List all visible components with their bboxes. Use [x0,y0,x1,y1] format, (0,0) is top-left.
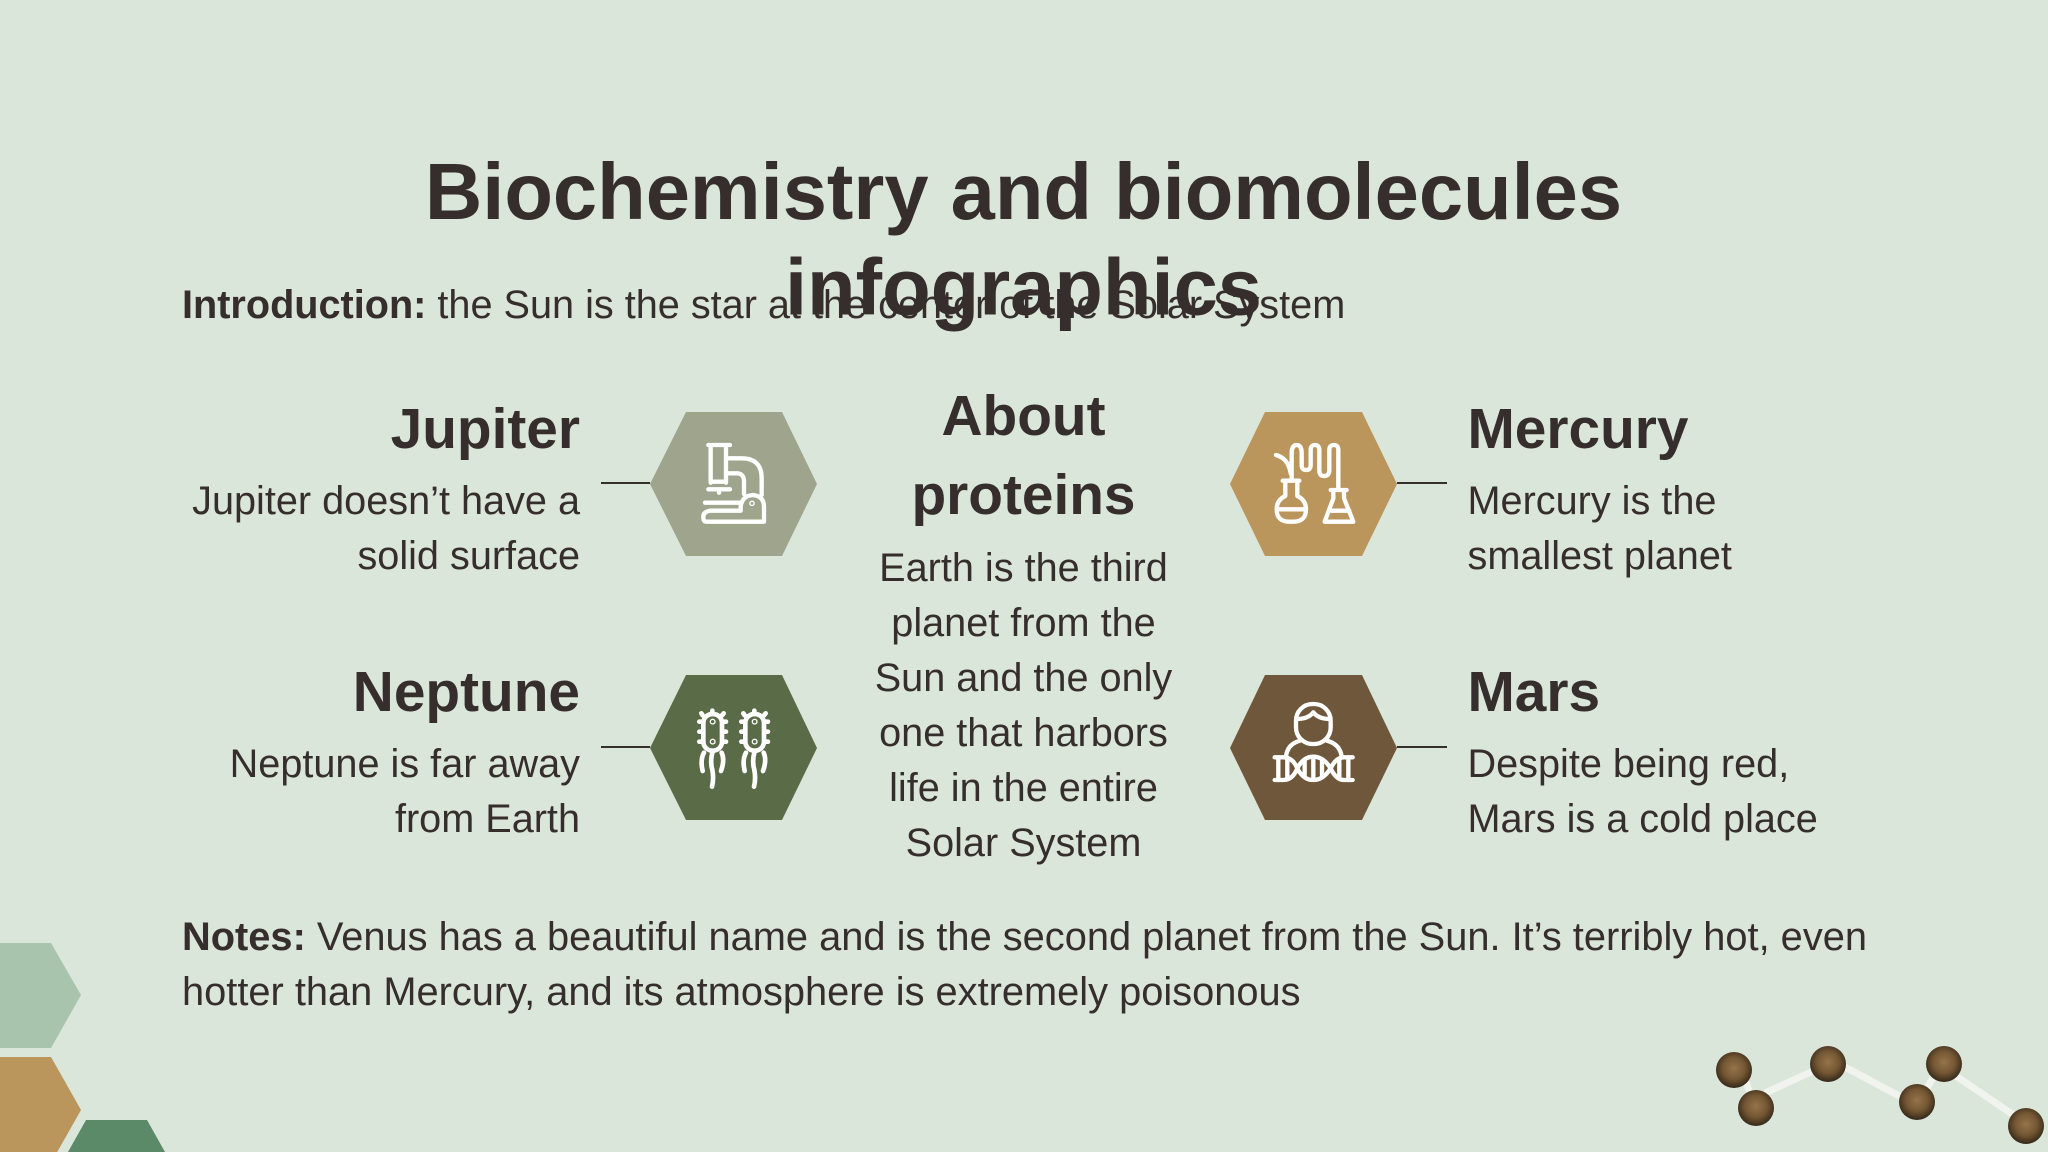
connector: Mars [1397,746,1447,748]
panel: Neptune text: Neptune is far away [230,742,580,786]
panel: Mercury text: Mercury [1468,398,1689,461]
panel: Neptune text: Neptune [353,661,580,724]
panel: Mars text: Mars is a cold place [1468,797,1818,841]
panel: Mercury text: Mercury is the [1468,479,1716,523]
panel: About proteins center text: Earth is the third [879,546,1168,590]
molecule decoration: bottom right [1716,1046,2044,1144]
panel: Jupiter text: solid surface [357,534,580,578]
panel: About proteins center text: life in the entire [889,766,1158,810]
panel: About proteins center text: Sun and the only [875,656,1172,700]
notes text: Notes: Venus has a beautiful name and is the second planet from the Sun. It’s terribly hot, even [182,915,1867,959]
panel: About proteins center text: About [941,385,1106,448]
panel: About proteins center text [875,385,1172,865]
title: infographics [785,242,1262,332]
connector: Mercury [1397,482,1447,484]
notes text: hotter than Mercury, and its atmosphere is extremely poisonous [182,970,1301,1014]
hexagon icon: bacteria [650,675,817,820]
panel: Neptune text [230,661,580,841]
title [425,147,1622,332]
panel: Mars text: Despite being red, [1468,742,1789,786]
decorative hexagons: bottom left [0,943,165,1152]
panel: Neptune text: from Earth [395,797,580,841]
title: Biochemistry and biomolecules [425,147,1622,236]
hexagon icon: person with DNA [1230,675,1397,820]
panel: Mercury text [1468,398,1732,578]
connector: Jupiter [601,482,650,484]
hexagon icon: flasks and tube [1230,412,1397,556]
connector: Neptune [601,746,650,748]
panel: About proteins center text: Solar System [906,821,1141,865]
panel: Mercury text: smallest planet [1468,534,1732,578]
hexagon icon: microscope [650,412,817,556]
panel: Mars text [1468,661,1818,841]
panel: Jupiter text [192,398,581,578]
panel: About proteins center text: planet from the [891,601,1156,645]
introduction text: Introduction: the Sun is the star at the center of the Solar System [182,283,1345,327]
panel: Mars text: Mars [1468,661,1600,724]
panel: About proteins center text: one that harbors [879,711,1168,755]
notes text [182,915,1867,1014]
panel: Jupiter text: Jupiter doesn’t have a [192,479,581,523]
panel: About proteins center text: proteins [911,464,1136,527]
panel: Jupiter text: Jupiter [391,398,580,461]
